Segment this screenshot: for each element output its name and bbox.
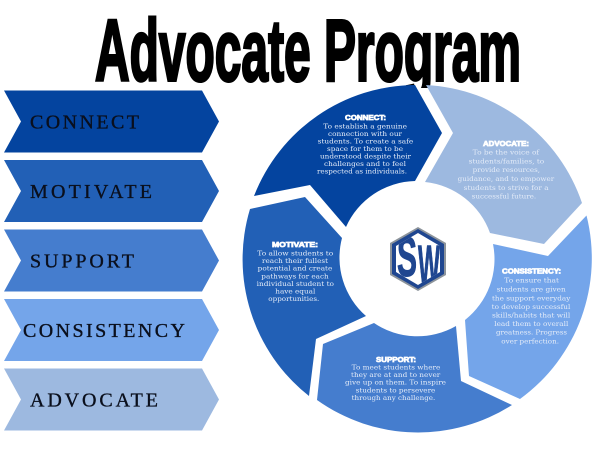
segment: motivate: individual student to xyxy=(257,280,334,288)
segment: consistency: CONSISTENCY: xyxy=(502,269,561,276)
segment: advocate xyxy=(425,85,582,244)
chevron list xyxy=(4,90,219,430)
chevron: support: SUPPORT xyxy=(30,250,134,272)
segment: connect: students. To create a safe xyxy=(318,138,413,146)
segment: consistency: skills/habits that will xyxy=(492,312,570,320)
segment: support: students to persevere xyxy=(356,386,436,394)
chevron: advocate: ADVOCATE xyxy=(30,390,158,412)
segment: support: To meet students where xyxy=(352,364,441,372)
segment: consistency: students are given xyxy=(497,286,566,294)
segment: motivate: opportunities. xyxy=(268,295,319,303)
segment: consistency: lead them to overall xyxy=(494,320,568,328)
segment: connect: space for them to be xyxy=(327,145,403,153)
segment: advocate: To be the voice of xyxy=(473,149,540,157)
segment: motivate: potential and create xyxy=(258,265,333,273)
chevron: connect xyxy=(4,90,219,152)
chevron: advocate xyxy=(4,368,219,430)
segment: motivate xyxy=(243,197,366,396)
cycle diagram xyxy=(243,85,592,432)
segment: advocate: students/families, to xyxy=(469,157,544,165)
chevron: support xyxy=(4,230,219,292)
segment: support: give up on them. To inspire xyxy=(345,379,446,387)
segment: connect: CONNECT: xyxy=(345,115,386,122)
segment: support: SUPPORT: xyxy=(376,357,416,364)
segment: motivate: MOTIVATE: xyxy=(272,242,318,249)
logo: SW hexagon: W xyxy=(418,233,440,296)
segment: advocate: successful future. xyxy=(472,192,536,200)
segment: connect: respected as individuals. xyxy=(317,168,407,176)
segment: consistency: to develop successful xyxy=(492,303,570,311)
segment: advocate: provide resources, xyxy=(473,166,540,174)
chevron: consistency: CONSISTENCY xyxy=(23,320,185,342)
segment: consistency: over perfection. xyxy=(501,337,559,345)
segment: motivate: have equal xyxy=(275,287,315,295)
segment: support xyxy=(317,323,512,432)
segment: motivate: reach their fullest xyxy=(262,257,328,265)
logo: SW hexagon xyxy=(390,225,446,296)
segment: consistency xyxy=(465,216,592,399)
segment: motivate: pathways for each xyxy=(261,272,329,280)
segment: connect: connection with our xyxy=(328,130,403,138)
segment: advocate: guidance, and to empower xyxy=(458,175,555,183)
chevron: connect: CONNECT xyxy=(30,112,139,134)
segment: consistency: To ensure that xyxy=(504,277,559,285)
segment: support: through any challenge. xyxy=(352,394,435,402)
segment: motivate: To allow students to xyxy=(257,250,333,258)
segment: consistency: greatness. Progress xyxy=(496,329,567,337)
segment: support: they are at and to never xyxy=(351,371,441,379)
segment: connect: To establish a genuine xyxy=(323,122,407,130)
segment: consistency: the support everyday xyxy=(492,294,571,302)
chevron: consistency xyxy=(4,299,219,361)
segment: connect: challenges and to feel xyxy=(324,160,406,168)
segment: connect xyxy=(254,85,442,227)
logo: SW hexagon: S xyxy=(397,225,417,288)
segment: connect: understood despite their xyxy=(320,152,412,160)
segment: advocate: ADVOCATE: xyxy=(483,141,529,148)
chevron: motivate: MOTIVATE xyxy=(30,181,152,203)
chevron: motivate xyxy=(4,160,219,222)
segment: advocate: students to strive for a xyxy=(464,184,549,192)
